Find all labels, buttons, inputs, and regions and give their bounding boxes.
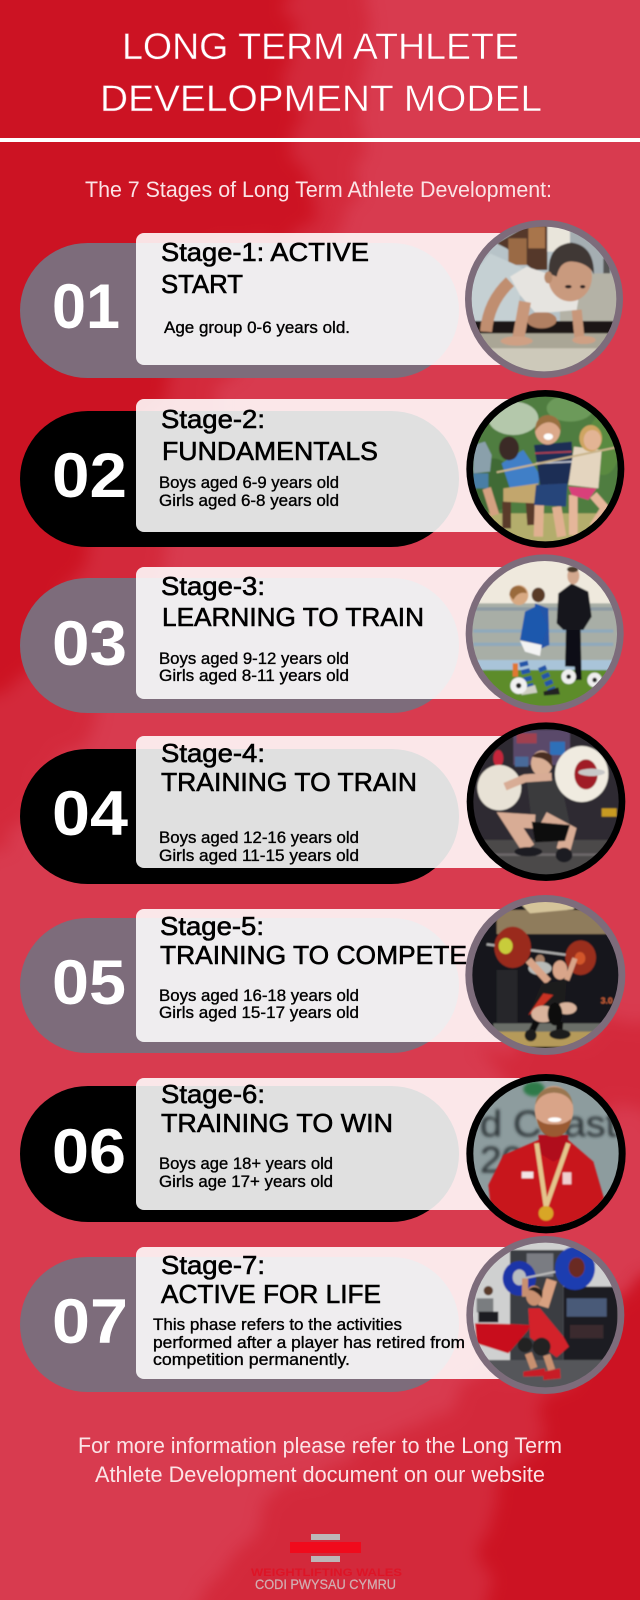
stage 4 heading: TRAINING TO TRAIN — [161, 767, 417, 797]
footer text: Athlete Development document on our website — [95, 1462, 545, 1487]
stage 4 text — [159, 829, 359, 865]
stage 4 text: Boys aged 12-16 years old — [159, 829, 359, 847]
stage 1 text: Age group 0-6 years old. — [164, 319, 350, 337]
stage 7 text: competition permanently. — [153, 1351, 350, 1369]
stage 2 text: Girls aged 6-8 years old — [159, 492, 339, 510]
stage 4 photo: young lifter in front squat — [466, 722, 626, 881]
title — [100, 26, 542, 119]
stage 2 text — [159, 474, 339, 510]
stage 4 text: Girls aged 11-15 years old — [159, 847, 359, 865]
footer text: For more information please refer to the Long Term — [78, 1433, 562, 1458]
stage 1 number: 01 — [52, 272, 120, 342]
stage 1 card — [136, 233, 526, 365]
stage 6 text: Girls age 17+ years old — [159, 1173, 333, 1191]
stage 2 heading: FUNDAMENTALS — [162, 436, 378, 466]
stage 4 card — [136, 736, 526, 868]
footer text — [78, 1433, 562, 1487]
panel: stage 2 — [20, 385, 630, 555]
logo: Codi Pwysau Cymru: CODI PWYSAU CYMRU — [255, 1576, 396, 1592]
title divider — [0, 138, 640, 142]
stage 7 heading: Stage-7: — [161, 1250, 265, 1280]
stage 5 text: Boys aged 16-18 years old — [159, 987, 359, 1005]
stage 3 text: Boys aged 9-12 years old — [159, 650, 349, 668]
stage 5 photo: lifter in snatch: 3.0 — [601, 995, 613, 1005]
stage 6 photo: medal winner in red jacket: d Coast — [480, 1104, 617, 1145]
panel: stage 7 — [20, 1230, 630, 1400]
stage 4 number: 04 — [52, 779, 128, 849]
stage 1 heading: START — [161, 269, 243, 299]
subtitle: The 7 Stages of Long Term Athlete Development: — [85, 177, 552, 202]
stage 7 card — [136, 1247, 526, 1379]
stage 6 text — [159, 1155, 333, 1191]
panel: stage 5 — [20, 890, 630, 1060]
stage 3 text — [159, 650, 349, 685]
stage 1 photo: crawling baby — [465, 220, 623, 378]
logo: Codi Pwysau Cymru: WEIGHTLIFTING WALES — [251, 1567, 402, 1579]
stage 2 text: Boys aged 6-9 years old — [159, 474, 339, 492]
stage 7 text — [153, 1316, 465, 1369]
stage 3 text: Girls aged 8-11 years old — [159, 667, 349, 685]
stage 4 pill — [20, 749, 459, 884]
stage 7 number: 07 — [52, 1287, 128, 1357]
stage 3 heading: LEARNING TO TRAIN — [162, 602, 424, 632]
stage 5 heading: Stage-5: — [160, 911, 264, 941]
stage 2 heading — [161, 404, 378, 466]
stage 5 card — [136, 909, 526, 1042]
panel: stage 1 — [20, 215, 630, 385]
stage 6 text: Boys age 18+ years old — [159, 1155, 333, 1173]
stage 6 card — [136, 1078, 526, 1210]
stage 7 heading: ACTIVE FOR LIFE — [161, 1279, 381, 1309]
stage 6 heading: TRAINING TO WIN — [161, 1108, 393, 1138]
stage 2 heading: Stage-2: — [161, 404, 265, 434]
stage 3 heading — [161, 571, 424, 632]
stage 7 text: performed after a player has retired from — [153, 1334, 465, 1352]
stage 5 number: 05 — [52, 948, 126, 1018]
stage 7 heading — [161, 1250, 381, 1309]
title: LONG TERM ATHLETE — [122, 26, 519, 67]
stage 2 photo: children in tug of war — [466, 390, 624, 548]
stage 1 pill — [20, 243, 459, 378]
stage 1 heading — [161, 237, 369, 299]
stage 3 heading: Stage-3: — [161, 571, 265, 601]
title: DEVELOPMENT MODEL — [100, 78, 542, 119]
stage 1 heading: Stage-1: ACTIVE — [161, 237, 369, 267]
stage 7 text: This phase refers to the activities — [153, 1316, 402, 1334]
stage 5 heading — [160, 911, 467, 970]
stage 6 photo: medal winner in red jacket — [466, 1074, 626, 1234]
stage 2 pill — [20, 411, 459, 547]
panel: stage 6 — [20, 1065, 630, 1235]
stage 3 card — [136, 567, 526, 699]
stage 6 heading — [161, 1079, 393, 1138]
panel: stage 4 — [20, 715, 630, 885]
stage 6 heading: Stage-6: — [161, 1079, 265, 1109]
stage 5 photo: lifter in snatch — [465, 895, 626, 1055]
stage 5 pill — [20, 918, 459, 1053]
stage 5 heading: TRAINING TO COMPETE — [160, 940, 467, 970]
stage 3 pill — [20, 578, 459, 713]
stage 5 text: Girls aged 15-17 years old — [159, 1004, 359, 1022]
stage 3 number: 03 — [52, 609, 127, 679]
stage 7 photo: lifter with blue plates — [466, 1236, 624, 1394]
stage 2 card — [136, 399, 526, 532]
stage 4 heading: Stage-4: — [161, 738, 265, 768]
stage 4 heading — [161, 738, 417, 797]
stage 6 photo: medal winner in red jacket: 20 — [480, 1139, 523, 1180]
stage 6 pill — [20, 1086, 459, 1222]
panel: stage 3 — [20, 550, 630, 713]
stage 3 photo: football coaching — [460, 550, 630, 713]
stage 2 number: 02 — [52, 441, 127, 511]
stage 7 pill — [20, 1257, 459, 1392]
logo: Codi Pwysau Cymru — [251, 1534, 402, 1592]
stage 5 text — [159, 987, 359, 1022]
stage 6 number: 06 — [52, 1117, 126, 1187]
